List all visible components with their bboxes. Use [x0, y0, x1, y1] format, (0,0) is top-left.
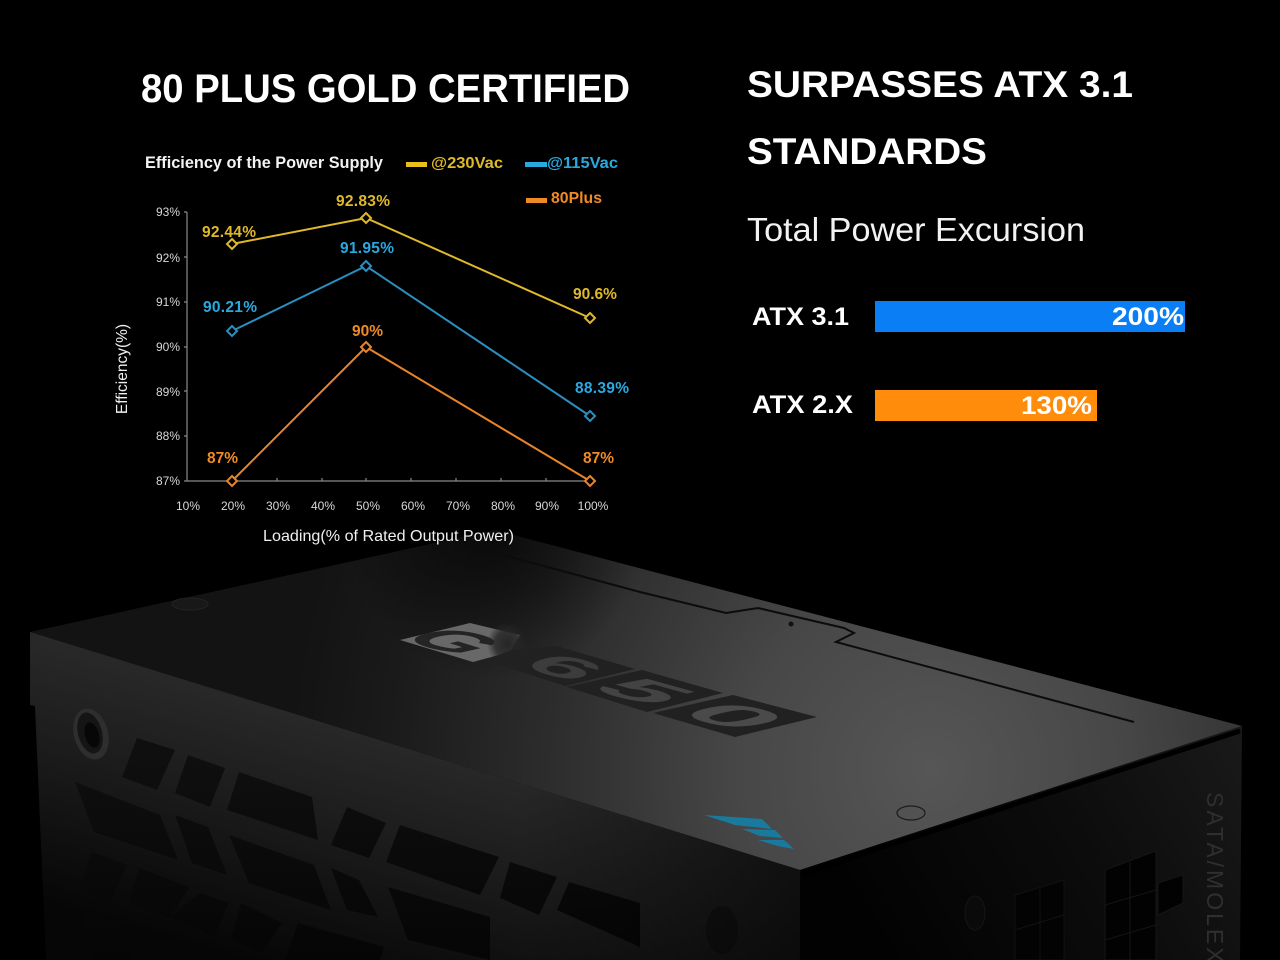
y-axis tick labels [156, 205, 180, 488]
y-axis tick labels: 87% [156, 474, 180, 488]
legend: 230Vac: @230Vac [431, 155, 503, 172]
row: ATX 3.1: ATX 3.1 [752, 303, 849, 331]
legend: 80Plus [526, 190, 602, 207]
x-axis title: Loading(% of Rated Output Power) [263, 528, 514, 545]
legend: 80Plus: 80Plus [551, 190, 602, 207]
x-axis tick labels: 70% [446, 499, 470, 513]
PSU right side face [800, 726, 1242, 960]
right heading line 2: STANDARDS [747, 131, 987, 172]
data labels 80Plus: 87% [583, 450, 614, 467]
data labels 115Vac: 90.21% [203, 299, 257, 316]
top face screw left [172, 598, 208, 610]
right heading line 1: SURPASSES ATX 3.1 [747, 64, 1133, 105]
logo text 6: 6 [507, 648, 623, 687]
efficiency line chart [114, 154, 629, 545]
logo: G650 [382, 622, 817, 737]
x-axis tick labels: 40% [311, 499, 335, 513]
series: 230Vac [227, 213, 595, 323]
PSU top face [30, 530, 1242, 870]
PSU left side face [30, 632, 800, 960]
y-axis tick labels: 90% [156, 340, 180, 354]
x-axis tick labels: 90% [535, 499, 559, 513]
row: ATX 2.X: 130% [1021, 392, 1092, 420]
y-axis tick labels: 92% [156, 251, 180, 265]
front edge shadow [802, 731, 1240, 875]
series: 80Plus [227, 342, 595, 486]
data labels 230Vac: 90.6% [573, 286, 617, 303]
data labels 230Vac: 92.83% [336, 193, 390, 210]
connector socket 2 [1015, 880, 1064, 960]
x-axis tick labels: 20% [221, 499, 245, 513]
connector screw [965, 896, 985, 930]
legend: 115Vac: @115Vac [547, 155, 618, 172]
logo plate G [400, 623, 520, 662]
y-axis tick labels: 88% [156, 429, 180, 443]
left side ventilation holes [75, 738, 640, 960]
right side bolt [706, 906, 738, 954]
left heading: 80 PLUS GOLD CERTIFIED [141, 67, 630, 111]
x-axis tick labels: 80% [491, 499, 515, 513]
chart title: Efficiency of the Power Supply [145, 154, 384, 172]
data labels 115Vac: 91.95% [340, 240, 394, 257]
left side bolt [68, 704, 114, 764]
row: ATX 2.X: ATX 2.X [752, 391, 853, 419]
axes [184, 212, 592, 481]
data labels 115Vac [203, 240, 629, 397]
data labels 80Plus: 87% [207, 450, 238, 467]
data labels 80Plus: 90% [352, 323, 383, 340]
x-axis tick labels [176, 499, 609, 513]
back corner fade [30, 530, 1242, 870]
row: ATX 2.X [752, 390, 1097, 421]
data labels 80Plus [207, 323, 614, 467]
product photo: power supply unit [30, 530, 1242, 960]
logo text G: G [382, 623, 528, 660]
series: 115Vac [227, 261, 595, 421]
y-axis tick labels: 89% [156, 385, 180, 399]
x-axis tick labels: 30% [266, 499, 290, 513]
x-axis tick labels: 10% [176, 499, 200, 513]
side darkening near the front corner [520, 783, 800, 960]
logo plate 5 [567, 670, 723, 712]
small hole [788, 622, 794, 626]
logo text 5: 5 [570, 673, 718, 710]
data labels 230Vac: 92.44% [202, 224, 256, 241]
x-axis tick labels: 100% [578, 499, 609, 513]
connector socket 1 [1105, 851, 1183, 960]
row: ATX 3.1 [752, 301, 1185, 332]
data labels 115Vac: 88.39% [575, 380, 629, 397]
y-axis tick labels: 91% [156, 295, 180, 309]
logo text 0: 0 [656, 697, 812, 735]
data labels 230Vac [202, 193, 617, 303]
y-axis title: Efficiency(%) [114, 324, 131, 414]
bar chart: total power excursion [752, 301, 1185, 421]
row: ATX 3.1: 200% [1112, 303, 1184, 331]
logo plate 6 [485, 646, 635, 686]
logo plate 0 [653, 695, 817, 737]
x-axis tick labels: 50% [356, 499, 380, 513]
top panel groove [470, 546, 1134, 722]
subheading: Total Power Excursion [747, 211, 1085, 248]
logo G fade [487, 622, 527, 666]
top face screw right [897, 806, 925, 820]
x-axis tick labels: 60% [401, 499, 425, 513]
y-axis tick labels: 93% [156, 205, 180, 219]
icon: blue wing logo [704, 815, 794, 849]
